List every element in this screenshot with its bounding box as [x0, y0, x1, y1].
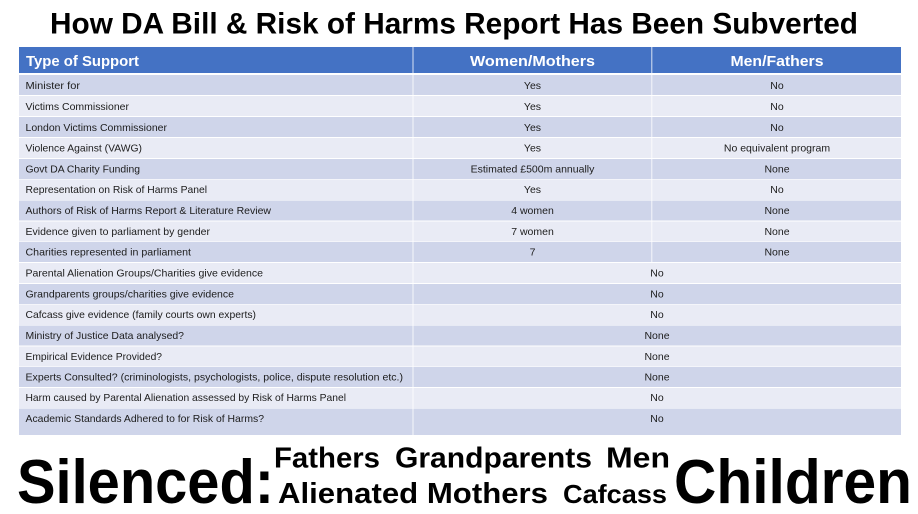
women/mothers column: 4 women — [511, 205, 554, 217]
first column: type of support — [26, 80, 403, 425]
first column: type of support: Representation on Risk of Harms Panel — [26, 184, 207, 196]
silenced banner: Fathers — [274, 442, 380, 474]
first column: type of support: Govt DA Charity Funding — [26, 164, 140, 176]
women/mothers column: Yes — [524, 80, 541, 92]
table header row — [19, 47, 901, 73]
first column: type of support: Experts Consulted? (criminologists, psychologists, police, dispute resolution etc.) — [26, 372, 403, 384]
women/mothers column: Estimated £500m annually — [471, 164, 595, 176]
men/fathers column: None — [764, 226, 790, 238]
men/fathers column: None — [764, 246, 790, 258]
first column: type of support: Harm caused by Parental Alienation assessed by Risk of Harms Panel — [26, 392, 346, 404]
first column: type of support: Academic Standards Adhered to for Risk of Harms? — [26, 413, 264, 425]
first column: type of support: Grandparents groups/charities give evidence — [26, 288, 234, 300]
merged answers column: No — [650, 268, 664, 280]
men/fathers column: None — [764, 164, 790, 176]
women/mothers column: Yes — [524, 142, 541, 154]
table header row: Women/Mothers — [470, 54, 595, 70]
women/mothers column: Yes — [524, 122, 541, 134]
merged answers column: No — [650, 309, 664, 321]
men/fathers column: No — [770, 80, 784, 92]
first column: type of support: Ministry of Justice Data analysed? — [26, 330, 184, 342]
silenced banner: Grandparents — [395, 442, 592, 474]
merged answers column: No — [650, 288, 664, 300]
men/fathers column — [724, 80, 830, 258]
first column: type of support: Victims Commissioner — [26, 101, 129, 113]
table header row: Men/Fathers — [730, 54, 824, 70]
women/mothers column: 7 — [530, 246, 536, 258]
merged answers column: No — [650, 413, 664, 425]
merged answers column: None — [644, 351, 670, 363]
first column: type of support: Violence Against (VAWG) — [26, 142, 142, 154]
merged answers column — [644, 268, 670, 425]
silenced banner: Men — [606, 442, 670, 474]
first column: type of support: Empirical Evidence Provided? — [26, 351, 162, 363]
first column: type of support: Cafcass give evidence (family courts own experts) — [26, 309, 256, 321]
men/fathers column: No equivalent program — [724, 142, 830, 154]
silenced banner: Alienated Mothers — [278, 478, 548, 510]
merged answers column: None — [644, 372, 670, 384]
first column: type of support: Charities represented in parliament — [26, 246, 191, 258]
first column: type of support: London Victims Commissioner — [26, 122, 167, 134]
women/mothers column — [471, 80, 595, 258]
women/mothers column: Yes — [524, 101, 541, 113]
first column: type of support: Authors of Risk of Harms Report & Literature Review — [26, 205, 271, 217]
men/fathers column: No — [770, 122, 784, 134]
men/fathers column: No — [770, 184, 784, 196]
merged answers column: No — [650, 392, 664, 404]
table — [19, 47, 901, 435]
merged answers column: None — [644, 330, 670, 342]
silenced banner: Cafcass — [563, 479, 667, 509]
first column: type of support: Parental Alienation Groups/Charities give evidence — [26, 268, 263, 280]
men/fathers column: None — [764, 205, 790, 217]
first column: type of support: Evidence given to parliament by gender — [26, 226, 210, 238]
title: How DA Bill & Risk of Harms Report Has Been Subverted — [50, 8, 858, 40]
table header row: Type of Support — [26, 54, 139, 70]
silenced banner — [17, 442, 912, 514]
men/fathers column: No — [770, 101, 784, 113]
women/mothers column: 7 women — [511, 226, 554, 238]
women/mothers column: Yes — [524, 184, 541, 196]
table row backgrounds — [19, 47, 901, 435]
first column: type of support: Minister for — [26, 80, 81, 92]
